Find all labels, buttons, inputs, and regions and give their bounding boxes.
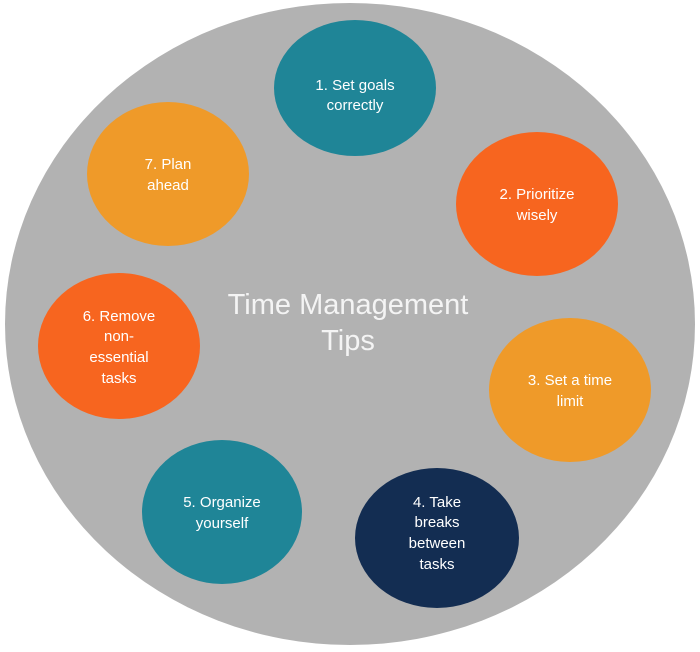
circle 1: set goals: correctly (327, 97, 384, 114)
circle 2: prioritize: wisely (516, 207, 558, 224)
circle 5: organize (142, 440, 302, 584)
circle 5: organize: 5. Organize (183, 494, 261, 511)
circle 2: prioritize (456, 132, 618, 276)
circle 6: remove tasks: essential (89, 349, 149, 366)
title: Time Management (228, 289, 468, 321)
circle 5: organize: yourself (196, 515, 249, 532)
circle 1: set goals: 1. Set goals (315, 77, 395, 94)
circle 4: take breaks: tasks (419, 556, 455, 573)
circle 3: time limit: 3. Set a time (528, 372, 612, 389)
title: Tips (321, 325, 375, 357)
circle 1: set goals (274, 20, 436, 156)
circle 6: remove tasks: tasks (101, 370, 137, 387)
circle 4: take breaks: breaks (414, 514, 460, 531)
circle 7: plan ahead: ahead (147, 177, 189, 194)
title (228, 289, 468, 357)
circle 4: take breaks: 4. Take (413, 494, 461, 511)
circle 4: take breaks: between (409, 535, 465, 552)
circle 3: time limit: limit (557, 393, 584, 410)
circle 3: time limit (489, 318, 651, 462)
circle 6: remove tasks: 6. Remove (83, 308, 155, 325)
circle 7: plan ahead: 7. Plan (145, 156, 191, 173)
circle 2: prioritize: 2. Prioritize (499, 186, 575, 203)
circle 4: take breaks (355, 468, 519, 608)
circle 7: plan ahead (87, 102, 249, 246)
circle 6: remove tasks (38, 273, 200, 419)
circle 6: remove tasks: non- (104, 328, 134, 345)
